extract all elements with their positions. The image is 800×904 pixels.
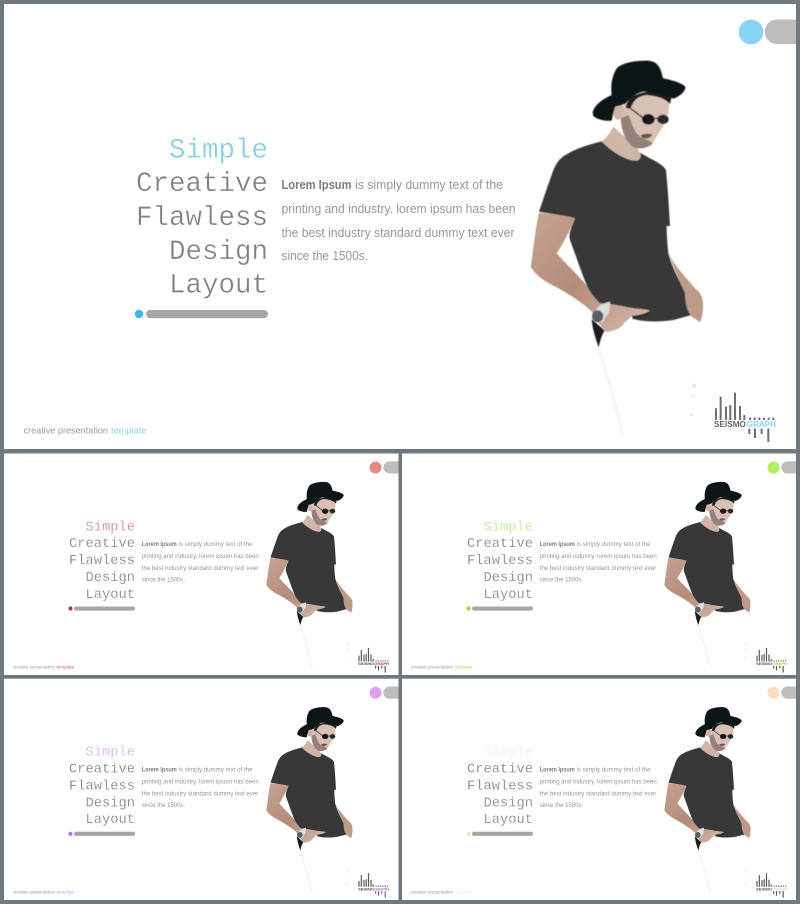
- logo: GRAPH: [374, 661, 389, 666]
- slide content: [411, 461, 796, 672]
- text block: [540, 541, 657, 584]
- footer caption: template: [56, 664, 75, 670]
- text block: the best industry standard dummy text ever: [142, 790, 259, 797]
- footer caption: template: [454, 664, 473, 670]
- logo: SEISMO: [714, 420, 746, 429]
- icon: accent circle and grey tab: [768, 461, 796, 474]
- heading: Creative: [467, 761, 533, 777]
- icon: accent circle and grey tab: [370, 687, 398, 699]
- photo: man in hat: [531, 61, 703, 433]
- icon: accent circle and grey tab: [768, 687, 796, 699]
- logo: [756, 873, 787, 898]
- heading: Flawless: [467, 778, 533, 794]
- footer caption: creative presentation: [24, 426, 108, 436]
- heading: Creative: [69, 536, 135, 552]
- slide background: [4, 679, 398, 900]
- logo: [358, 648, 389, 672]
- heading: Layout: [483, 588, 533, 603]
- heading: Simple: [483, 519, 533, 535]
- heading: Creative: [467, 536, 533, 552]
- text block: the best industry standard dummy text ever: [282, 225, 515, 240]
- footer caption: creative presentation: [411, 890, 453, 896]
- text block: Lorem Ipsum: [142, 541, 177, 548]
- progress bar with dot: [135, 310, 268, 318]
- slide background: [4, 4, 796, 449]
- footer caption: [411, 890, 473, 896]
- text block: is simply dummy text of the: [178, 541, 253, 548]
- progress bar with dot: [68, 832, 135, 836]
- icon: accent circle and grey tab: [370, 461, 398, 474]
- slide content: [411, 687, 796, 898]
- slide background: [4, 454, 398, 675]
- photo: man in hat: [266, 482, 353, 668]
- heading: Design: [483, 570, 533, 586]
- heading: Layout: [169, 270, 268, 302]
- text block: since the 1500s.: [540, 802, 583, 809]
- heading: Simple: [483, 745, 533, 761]
- icon: accent circle and grey tab: [739, 20, 796, 44]
- text block: printing and industry. lorem ipsum has been: [142, 553, 259, 560]
- panel: main slide (blue): [4, 4, 796, 449]
- text block: [282, 177, 516, 263]
- logo: GRAPH: [747, 420, 776, 429]
- heading: Simple: [85, 745, 135, 761]
- panel: small slide (violet): [4, 679, 398, 900]
- progress bar with dot: [466, 606, 533, 611]
- text block: since the 1500s.: [142, 576, 185, 584]
- footer caption: [411, 664, 473, 670]
- footer caption: template: [454, 890, 473, 896]
- progress bar with dot: [68, 606, 135, 611]
- text block: the best industry standard dummy text ever: [540, 565, 657, 572]
- text block: since the 1500s.: [282, 248, 368, 263]
- panel: small slide (green): [402, 454, 796, 675]
- slide background: [402, 679, 796, 900]
- text block: printing and industry. lorem ipsum has been: [142, 778, 259, 785]
- footer caption: creative presentation: [13, 664, 55, 670]
- text block: Lorem Ipsum: [142, 766, 177, 773]
- text block: printing and industry. lorem ipsum has been: [282, 201, 516, 216]
- text block: Lorem Ipsum: [282, 177, 352, 192]
- footer caption: creative presentation: [13, 890, 55, 896]
- slide content: [13, 461, 398, 672]
- text block: printing and industry. lorem ipsum has been: [540, 553, 657, 560]
- photo: man in hat: [664, 707, 751, 893]
- heading: [467, 745, 533, 828]
- text block: Lorem Ipsum: [540, 766, 575, 773]
- heading: Design: [85, 570, 135, 586]
- heading: Flawless: [136, 203, 268, 234]
- text block: is simply dummy text of the: [355, 177, 503, 192]
- heading: Design: [85, 795, 135, 811]
- heading: Layout: [85, 813, 135, 828]
- text block: Lorem Ipsum: [540, 541, 575, 548]
- logo: SEISMO: [756, 661, 772, 666]
- panel: small slide (peach): [402, 679, 796, 900]
- heading: Simple: [85, 519, 135, 535]
- heading: Flawless: [69, 778, 135, 794]
- footer caption: [13, 890, 75, 896]
- text block: [142, 541, 259, 584]
- heading: [69, 519, 135, 603]
- text block: is simply dummy text of the: [178, 766, 253, 773]
- footer caption: template: [56, 890, 75, 896]
- heading: Design: [169, 237, 268, 268]
- heading: [136, 136, 268, 302]
- heading: [467, 519, 533, 603]
- slide background: [402, 454, 796, 675]
- heading: Flawless: [69, 553, 135, 569]
- heading: Simple: [169, 136, 268, 166]
- photo: man in hat: [664, 482, 751, 668]
- photo: man in hat: [266, 707, 353, 893]
- footer caption: creative presentation: [411, 664, 453, 670]
- heading: Creative: [136, 169, 268, 200]
- logo: SEISMO: [358, 886, 374, 891]
- text block: is simply dummy text of the: [576, 541, 651, 548]
- heading: Design: [483, 795, 533, 811]
- text block: [540, 766, 657, 809]
- logo: [714, 393, 776, 442]
- logo: GRAPH: [772, 886, 787, 891]
- heading: [69, 745, 135, 828]
- heading: Layout: [483, 813, 533, 828]
- heading: Layout: [85, 588, 135, 603]
- text block: since the 1500s.: [540, 576, 583, 584]
- progress bar with dot: [466, 832, 533, 836]
- text block: printing and industry. lorem ipsum has been: [540, 778, 657, 785]
- logo: SEISMO: [756, 886, 772, 891]
- text block: [142, 766, 259, 809]
- logo: GRAPH: [374, 886, 389, 891]
- logo: [358, 873, 389, 898]
- slide content: [13, 687, 398, 898]
- footer caption: template: [111, 426, 146, 436]
- logo: [756, 648, 787, 672]
- text block: is simply dummy text of the: [576, 766, 651, 773]
- text block: the best industry standard dummy text ever: [142, 565, 259, 572]
- footer caption: [13, 664, 75, 670]
- text block: since the 1500s.: [142, 802, 185, 809]
- panel: small slide (red): [4, 454, 398, 675]
- logo: GRAPH: [772, 661, 787, 666]
- text block: the best industry standard dummy text ever: [540, 790, 657, 797]
- logo: SEISMO: [358, 661, 374, 666]
- heading: Flawless: [467, 553, 533, 569]
- heading: Creative: [69, 761, 135, 777]
